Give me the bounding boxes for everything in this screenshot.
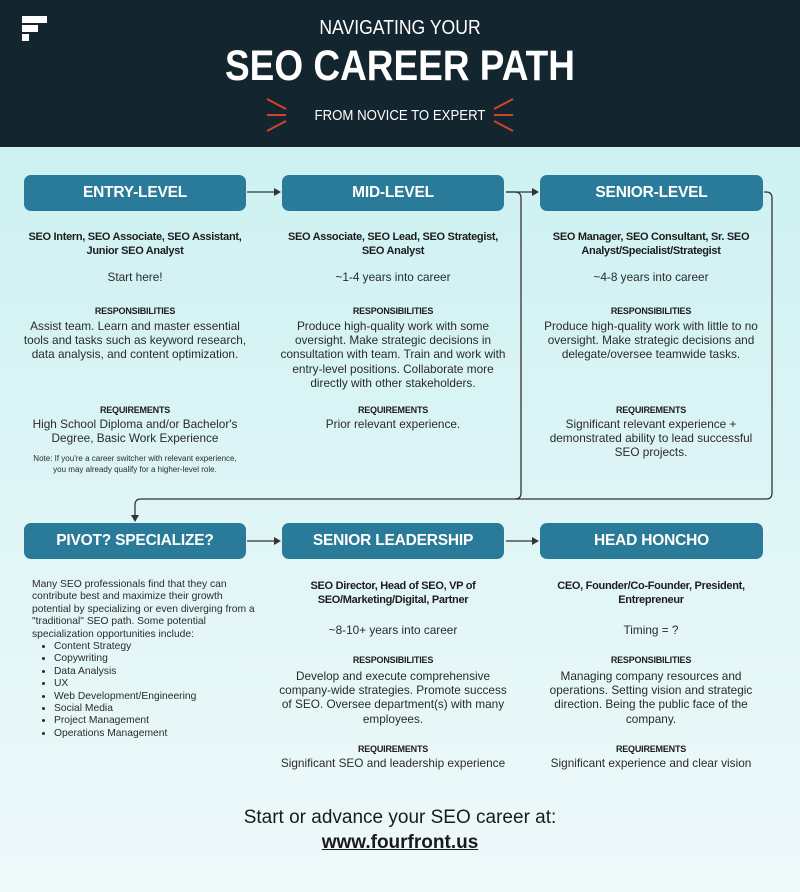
- panel: head honcho text: Timing = ?: [624, 623, 678, 637]
- box: mid-level: [282, 175, 504, 211]
- panel: senior leadership text: RESPONSIBILITIES: [353, 655, 433, 665]
- list: specializations: Data Analysis: [54, 666, 116, 677]
- panel: entry-level text: Start here!: [107, 270, 163, 284]
- panel: senior-level text: RESPONSIBILITIES: [611, 306, 691, 316]
- panel: mid-level text: REQUIREMENTS: [358, 405, 428, 415]
- panel: mid-level text: [281, 231, 505, 431]
- list: specializations: UX: [54, 678, 68, 689]
- list: specializations: Social Media: [54, 703, 113, 714]
- panel: mid-level text: SEO Analyst: [362, 245, 424, 257]
- panel: pivot text: Many SEO professionals find that they can contribute best and maximize their growth potential by specializing or even diverging from a "traditional" SEO path. Some potential specialization opportunities include:: [32, 579, 255, 640]
- panel: head honcho text: Significant experience and clear vision: [551, 756, 751, 770]
- title: [225, 17, 575, 90]
- panel: entry-level text: you may already qualify for a higher-level role.: [53, 464, 217, 474]
- panel: senior leadership text: Develop and execute comprehensive company-wide strategies. Promote success of SEO. Oversee department(s) with many employees.: [279, 669, 507, 726]
- panel: mid-level text: Prior relevant experience.: [326, 417, 460, 431]
- list: specializations: Copywriting: [54, 653, 108, 664]
- box: pivot: PIVOT? SPECIALIZE?: [56, 532, 214, 549]
- panel: entry-level text: Junior SEO Analyst: [87, 245, 183, 257]
- logo icon: [22, 16, 47, 41]
- panel: entry-level text: RESPONSIBILITIES: [95, 306, 175, 316]
- box: senior-level: [540, 175, 763, 211]
- panel: senior-level text: SEO Manager, SEO Consultant, Sr. SEO: [553, 231, 749, 243]
- panel: head honcho text: Entrepreneur: [618, 594, 684, 606]
- box: senior leadership: SENIOR LEADERSHIP: [313, 532, 473, 549]
- panel: head honcho text: RESPONSIBILITIES: [611, 655, 691, 665]
- panel: head honcho text: Managing company resources and operations. Setting vision and strategic direction. Being the public face of the company.: [550, 669, 752, 726]
- box: pivot: [24, 523, 246, 559]
- panel: mid-level text: Produce high-quality work with some oversight. Make strategic decisions in consultation with team. Train and work with entry-level positions. Collaborate more directly with other stakeholders.: [281, 319, 505, 390]
- panel: senior-level text: Produce high-quality work with little to no oversight. Make strategic decisions and delegate/oversee teamwide tasks.: [544, 319, 758, 361]
- box: mid-level: MID-LEVEL: [352, 184, 434, 201]
- box: head honcho: HEAD HONCHO: [594, 532, 709, 549]
- box: senior-level: SENIOR-LEVEL: [595, 184, 708, 201]
- panel: mid-level text: SEO Associate, SEO Lead, SEO Strategist,: [288, 231, 498, 243]
- panel: senior leadership text: [279, 580, 507, 770]
- panel: senior leadership text: Significant SEO and leadership experience: [281, 756, 505, 770]
- panel: entry-level text: Assist team. Learn and master essential tools and tasks such as keyword research, data analysis, and content optimization.: [24, 319, 246, 361]
- panel: head honcho text: CEO, Founder/Co-Founder, President,: [557, 580, 745, 592]
- list: specializations: Web Development/Engineering: [54, 691, 196, 702]
- panel: senior leadership text: ~8-10+ years into career: [329, 623, 457, 637]
- panel: senior-level text: [544, 231, 758, 459]
- list: specializations: Project Management: [54, 715, 149, 726]
- panel: entry-level text: Degree, Basic Work Experience: [52, 431, 218, 445]
- header: [0, 0, 800, 147]
- panel: senior-level text: Significant relevant experience +: [566, 417, 736, 431]
- list: specializations: Operations Management: [54, 728, 167, 739]
- panel: senior-level text: Analyst/Specialist/Strategist: [581, 245, 721, 257]
- subtitle with accent marks: [266, 98, 514, 132]
- panel: senior leadership text: REQUIREMENTS: [358, 744, 428, 754]
- panel: senior leadership text: SEO Director, Head of SEO, VP of: [310, 580, 476, 592]
- panel: entry-level text: [24, 231, 246, 474]
- panel: entry-level text: Note: If you're a career switcher with relevant experience,: [33, 454, 237, 463]
- subtitle with accent marks: FROM NOVICE TO EXPERT: [315, 107, 485, 124]
- list: specializations: [42, 641, 196, 739]
- title: SEO CAREER PATH: [225, 42, 575, 90]
- panel: head honcho text: [550, 580, 752, 770]
- box: senior leadership: [282, 523, 504, 559]
- panel: entry-level text: High School Diploma and/or Bachelor's: [33, 417, 237, 431]
- footer call to action: [244, 807, 556, 853]
- panel: senior-level text: ~4-8 years into career: [593, 270, 709, 284]
- panel: entry-level text: SEO Intern, SEO Associate, SEO Assistant,: [28, 231, 242, 243]
- panel: senior-level text: REQUIREMENTS: [616, 405, 686, 415]
- panel: senior-level text: SEO projects.: [615, 445, 687, 459]
- panel: senior leadership text: SEO/Marketing/Digital, Partner: [318, 594, 468, 606]
- panel: mid-level text: RESPONSIBILITIES: [353, 306, 433, 316]
- panel: head honcho text: REQUIREMENTS: [616, 744, 686, 754]
- box: head honcho: [540, 523, 763, 559]
- panel: entry-level text: REQUIREMENTS: [100, 405, 170, 415]
- footer call to action: Start or advance your SEO career at:: [244, 807, 556, 828]
- panel: mid-level text: ~1-4 years into career: [335, 270, 451, 284]
- footer call to action: www.fourfront.us: [322, 832, 478, 853]
- panel: senior-level text: demonstrated ability to lead successful: [550, 431, 752, 445]
- panel: pivot text: [32, 579, 255, 739]
- box: entry-level: ENTRY-LEVEL: [83, 184, 187, 201]
- box: entry-level: [24, 175, 246, 211]
- list: specializations: Content Strategy: [54, 641, 131, 652]
- title: NAVIGATING YOUR: [319, 17, 481, 39]
